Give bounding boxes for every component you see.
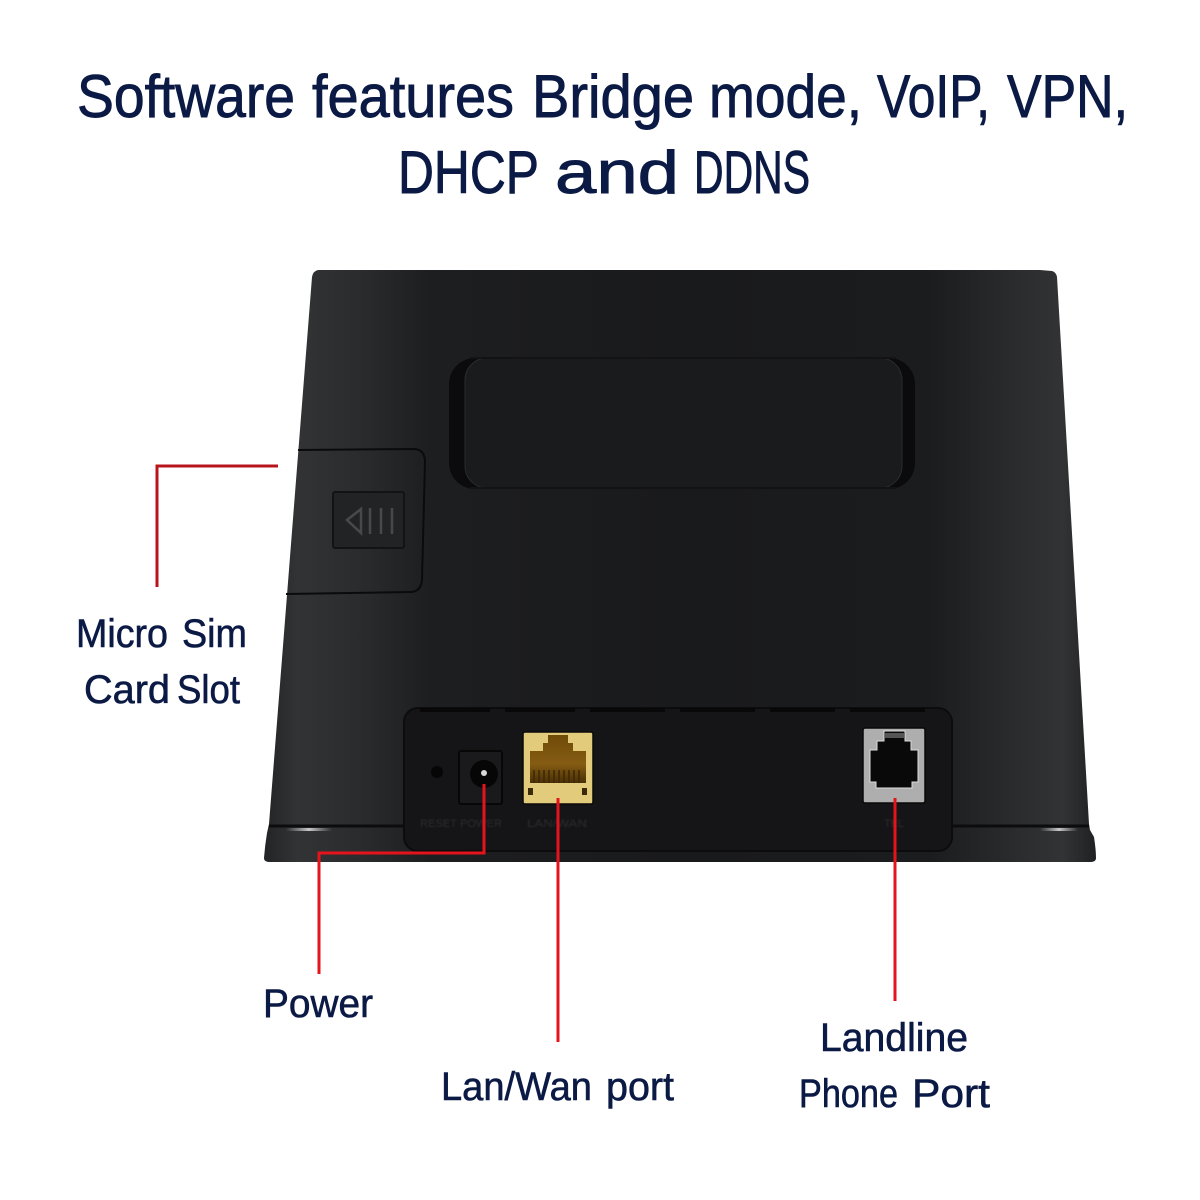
recessed handle — [449, 358, 915, 489]
title: Bridge — [532, 63, 694, 130]
title: Software — [77, 63, 295, 130]
callout: micro sim card slot — [76, 466, 278, 712]
port printed labels: TEL — [884, 818, 904, 830]
sim cover tab — [333, 492, 404, 548]
phone port — [863, 728, 925, 803]
callout: micro sim card slot: Card — [84, 668, 170, 712]
base groove — [269, 826, 1089, 831]
sim arrow icon — [347, 508, 392, 534]
callout: power — [263, 784, 484, 1026]
callout: micro sim card slot: Sim — [182, 612, 247, 656]
title: VoIP, — [877, 63, 990, 130]
port printed labels — [420, 818, 904, 830]
title: features — [312, 63, 514, 130]
title: DHCP — [398, 139, 539, 206]
title: DDNS — [694, 139, 810, 206]
title: VPN, — [1007, 63, 1128, 130]
port panel — [404, 708, 952, 851]
callout: lan/wan port: port — [606, 1065, 674, 1109]
callout: lan/wan port: Lan/Wan — [441, 1065, 592, 1109]
port printed labels: LAN/WAN — [527, 818, 587, 830]
power port — [459, 751, 502, 804]
callout: power: Power — [263, 982, 373, 1026]
router back view — [264, 270, 1096, 862]
callout: landline phone port — [799, 798, 990, 1116]
callout: lan/wan port — [441, 798, 674, 1109]
callout: landline phone port: Phone — [799, 1072, 898, 1116]
port printed labels: RESET POWER — [420, 818, 502, 830]
callout: landline phone port: Port — [912, 1072, 990, 1116]
title — [77, 63, 1128, 206]
router body — [264, 270, 1096, 862]
callout: micro sim card slot: Slot — [177, 668, 240, 712]
sim card cover — [286, 449, 425, 594]
title: and — [555, 139, 679, 206]
LAN port — [523, 732, 593, 804]
title: mode, — [709, 63, 862, 130]
reset hole — [431, 766, 443, 778]
callout: landline phone port: Landline — [820, 1016, 968, 1060]
callout: micro sim card slot: Micro — [76, 612, 168, 656]
